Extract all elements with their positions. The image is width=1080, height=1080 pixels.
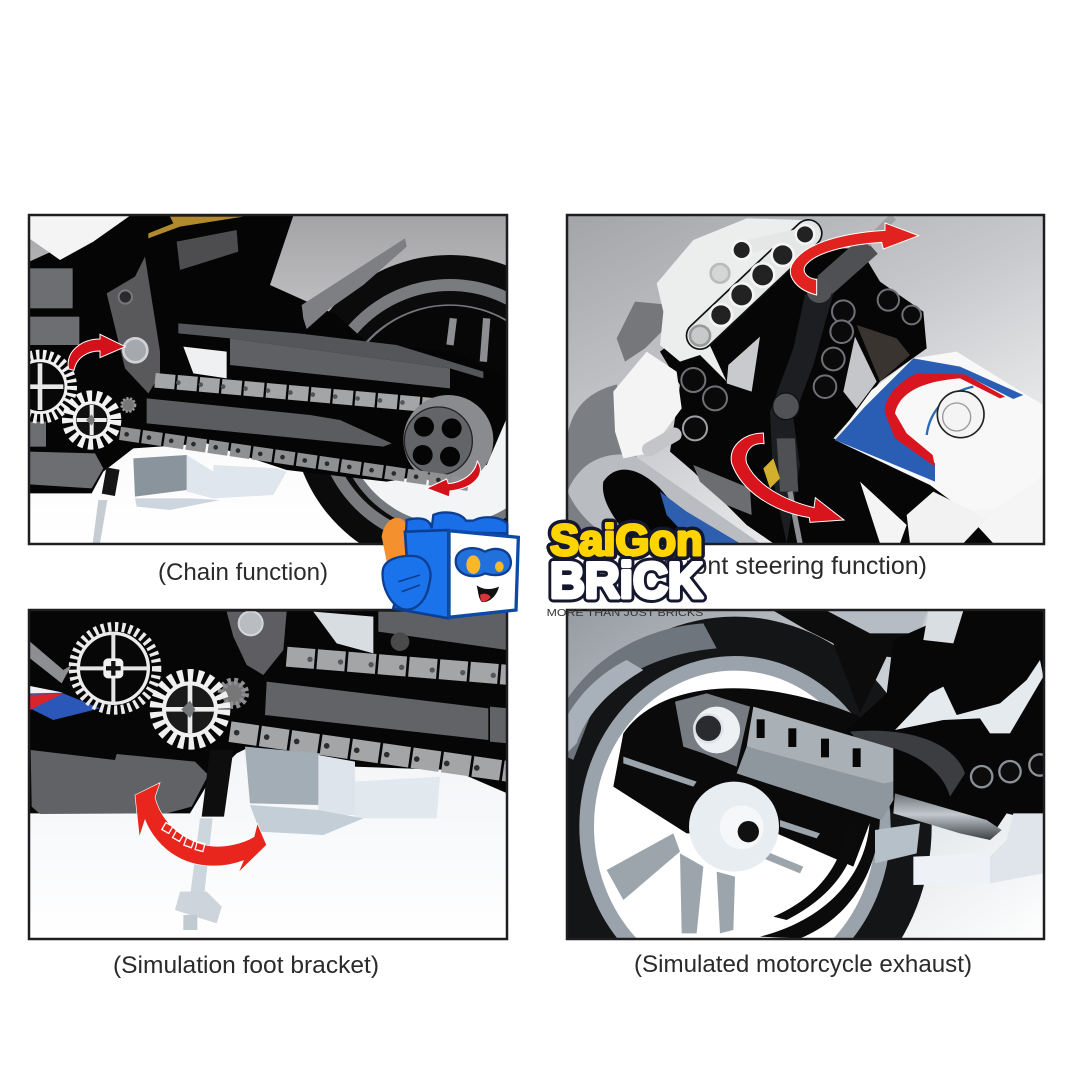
white fairing [29,216,130,260]
wheel decal [660,492,740,543]
white fork blocks [613,352,682,458]
black beam with rings [681,289,921,440]
right black body [847,611,1047,833]
blue decal [30,687,100,720]
pinion gear [221,681,245,705]
front gear [157,676,223,743]
brand name: SaiGon bold fill: SaiGon [550,516,703,565]
gap in the frame [727,337,760,392]
arrow: red double arrow [135,783,267,873]
frame plate [107,257,160,393]
muffler [737,707,893,820]
grey background patch [827,611,927,633]
small grey pinion [122,398,135,412]
silver block [30,642,72,683]
upper chain [155,380,460,408]
brand name: SaiGon: SaiGon [550,516,703,565]
yellow gear [763,458,780,488]
brown shadow piece [857,325,910,382]
white lower bodywork [860,482,907,543]
right technic beam [971,754,1051,787]
sprocket [403,395,493,485]
arrow: red steering arrow top [790,223,919,295]
rear fender [302,238,407,329]
stand foot [175,892,222,930]
engine base block [245,747,440,835]
caption: chain function: (Chain function) [158,559,328,586]
axle nut [693,707,740,753]
rim interior black [613,688,873,867]
black fork and frame [660,248,993,543]
upper chain guard [230,338,450,388]
rear swingarm arc [850,731,965,797]
chain guard [265,682,488,740]
brand name: BRiCK bold fill: BRiCK [550,552,703,608]
lower link [642,428,682,456]
panel: simulation foot bracket [27,607,510,940]
gold shock bolt [148,217,243,238]
panel: chain function [30,216,506,543]
grey side blocks [29,268,103,488]
top guard [378,612,507,650]
caption: front steering function: (Front steering function) [662,552,927,580]
black motorcycle body [29,216,507,493]
white block [313,612,373,653]
arrow: red steering arrow bottom [731,433,844,522]
brand name: BRiCK: BRiCK [550,552,703,608]
swingarm bracket [675,693,750,767]
icon: rear wheel with tyre [302,255,506,543]
right white block [875,813,1043,885]
tagline: MORE THAN JUST BRICKS [547,608,703,619]
black right rim arc [760,813,880,938]
logo: Saigon Brick [382,513,703,619]
grey frame plate [227,612,287,675]
rear gear [73,627,157,710]
front tyre [567,384,760,543]
icon: brick mascot [382,513,518,618]
caption: simulation foot bracket: (Simulation foot bracket) [113,952,379,979]
shock absorber [923,611,963,643]
upper chain [287,657,510,675]
arrow: red chain arrow right [427,461,480,497]
cover plate top [177,230,238,270]
pedal axle [239,611,263,635]
fender dark [773,611,927,713]
frame bolt [119,290,132,304]
white engine block [183,347,227,378]
caption: simulated motorcycle exhaust: (Simulated motorcycle exhaust) [634,951,972,978]
exhaust pipe [893,793,1002,840]
gear: front white [69,397,114,443]
white foot peg [895,660,1043,733]
side stand [93,467,120,543]
technic beam [690,225,814,346]
grey bracket [693,465,752,515]
stand spring [202,750,233,817]
arrow: red chain arrow left [68,334,125,370]
panel: simulated motorcycle exhaust [538,607,1051,1037]
red decal [30,693,63,710]
gear: rear white [30,350,77,424]
exhaust grey body [31,750,208,814]
rim ring [587,663,883,990]
white decal strip [30,686,63,693]
stand shaft [190,818,213,897]
lower chain [120,433,468,484]
black bike body [29,611,507,813]
white fairing [656,218,803,382]
headlight [616,302,664,362]
panel: front steering function [565,212,1048,545]
grey spokes [607,757,820,933]
fuel tank [835,352,1043,510]
bolt [391,632,409,651]
hub disc [689,782,779,872]
upper swingarm [178,323,483,378]
white engine base [133,455,286,510]
steering stem [770,217,893,543]
lower chain [230,732,510,772]
pedal axle [123,338,147,362]
tyre [538,617,932,1037]
panel borders [29,215,1044,939]
lower chain guard [147,398,392,447]
